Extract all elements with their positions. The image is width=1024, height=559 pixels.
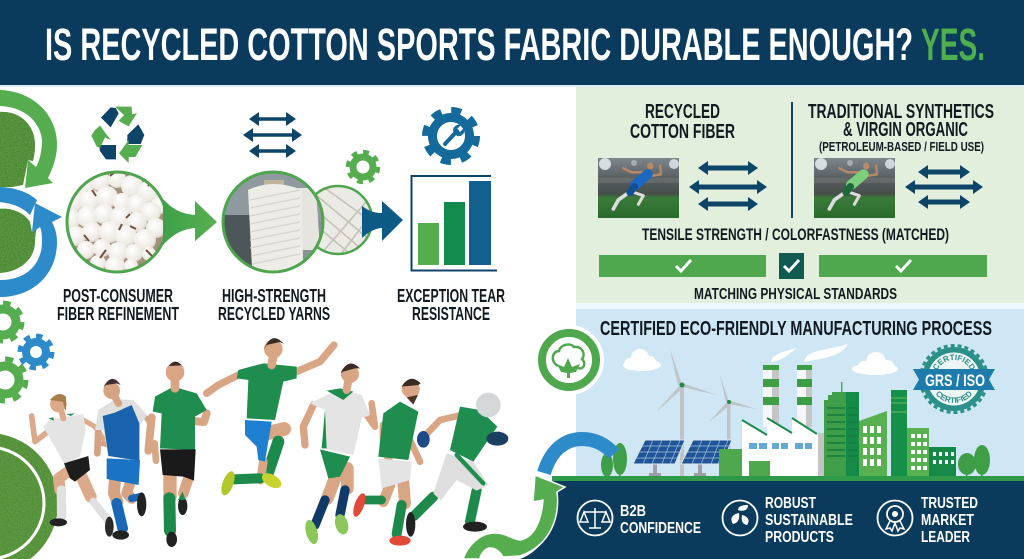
label: exception tear resistance: RESISTANCE <box>412 303 490 324</box>
wind turbines <box>656 349 756 476</box>
bottom-left grass circle <box>0 433 58 559</box>
match bar: left <box>599 255 766 277</box>
photo: runner in blue <box>598 158 679 218</box>
benefit: b2b confidence <box>578 500 701 537</box>
match check box <box>779 253 804 279</box>
athlete: american football player <box>406 393 508 537</box>
icon: small green gear <box>348 152 378 182</box>
label: exception tear resistance <box>397 285 505 324</box>
arrow: yarn to tear resistance <box>362 201 403 241</box>
benefit: robust sustainable products: SUSTAINABLE <box>765 512 853 529</box>
athlete: woman in white <box>32 394 114 537</box>
arrow: cotton to yarn <box>163 199 217 245</box>
athlete: green jersey black shorts <box>148 362 207 547</box>
photo: runner in green <box>814 158 895 218</box>
clouds <box>623 349 898 375</box>
header band <box>0 0 1024 87</box>
match bar: right <box>819 255 987 277</box>
panel: eco-friendly manufacturing <box>576 309 1024 476</box>
heading: recycled cotton fiber <box>630 101 735 143</box>
icon: tensile arrows above yarn <box>252 119 293 151</box>
benefit: b2b confidence: B2B <box>620 503 646 520</box>
arrow: green loop up to footer <box>463 475 565 559</box>
athlete: blue jersey <box>95 379 152 540</box>
benefit: robust sustainable products: PRODUCTS <box>765 529 834 546</box>
icon: cotton badge <box>534 325 604 395</box>
athletes running group <box>32 338 508 547</box>
comparison divider <box>791 102 793 218</box>
footer band <box>520 476 1024 559</box>
icon: right tensile arrows <box>914 172 974 202</box>
trees <box>601 443 990 478</box>
factory with chimneys <box>719 344 848 476</box>
badge: GRS / ISO certified: CERTIFIED <box>933 354 975 369</box>
benefit: trusted market leader: LEADER <box>921 529 970 546</box>
solar panels <box>633 440 732 476</box>
badge: GRS / ISO certified: GRS / ISO <box>925 371 985 390</box>
label: post-consumer fiber refinement <box>57 285 179 324</box>
label: high-strength recycled yarns: HIGH-STRENGTH <box>222 285 326 306</box>
benefit: robust sustainable products <box>722 495 853 546</box>
benefit: trusted market leader: MARKET <box>921 512 974 529</box>
label: high-strength recycled yarns <box>218 285 330 324</box>
label: exception tear resistance: EXCEPTION TEAR <box>397 285 505 306</box>
text: matching physical standards: MATCHING PHYSICAL STANDARDS <box>694 286 897 303</box>
benefit: b2b confidence: CONFIDENCE <box>620 520 701 537</box>
arrow: blue arc to factory <box>544 439 614 473</box>
badge: GRS / ISO certified: CERTIFIED <box>936 392 972 403</box>
label: high-strength recycled yarns: RECYCLED YARNS <box>218 303 330 324</box>
left decorative grass circles and loop arrows <box>0 90 62 297</box>
benefit: robust sustainable products: ROBUST <box>765 495 816 512</box>
benefit: trusted market leader: TRUSTED <box>921 495 978 512</box>
label: post-consumer fiber refinement: POST-CONSUMER <box>63 285 173 306</box>
athlete: green jersey white shorts <box>351 379 421 546</box>
city buildings <box>824 382 956 476</box>
title answer: YES. <box>921 19 985 70</box>
panel: fiber comparison <box>576 87 1024 309</box>
heading: recycled cotton fiber: RECYCLED <box>645 101 720 123</box>
heading: traditional synthetics and virgin organic <box>808 101 994 154</box>
left gears <box>0 303 52 401</box>
label: post-consumer fiber refinement: FIBER REFINEMENT <box>57 303 179 324</box>
benefit: trusted market leader <box>878 495 978 546</box>
athlete: jumping, blue shorts <box>207 338 334 497</box>
icon: left tensile arrows <box>698 168 758 204</box>
photo: cotton bolls <box>66 170 164 274</box>
icon: gear with wrench <box>426 110 476 162</box>
icon: recycling <box>91 107 144 163</box>
badge: GRS / ISO certified <box>913 344 995 414</box>
heading: recycled cotton fiber: COTTON FIBER <box>630 121 735 143</box>
photo: yarn spools <box>220 170 330 275</box>
photo: small yarn ball <box>316 184 372 256</box>
athlete: white jersey green shorts <box>303 364 375 545</box>
bar chart: tear resistance <box>412 176 497 270</box>
